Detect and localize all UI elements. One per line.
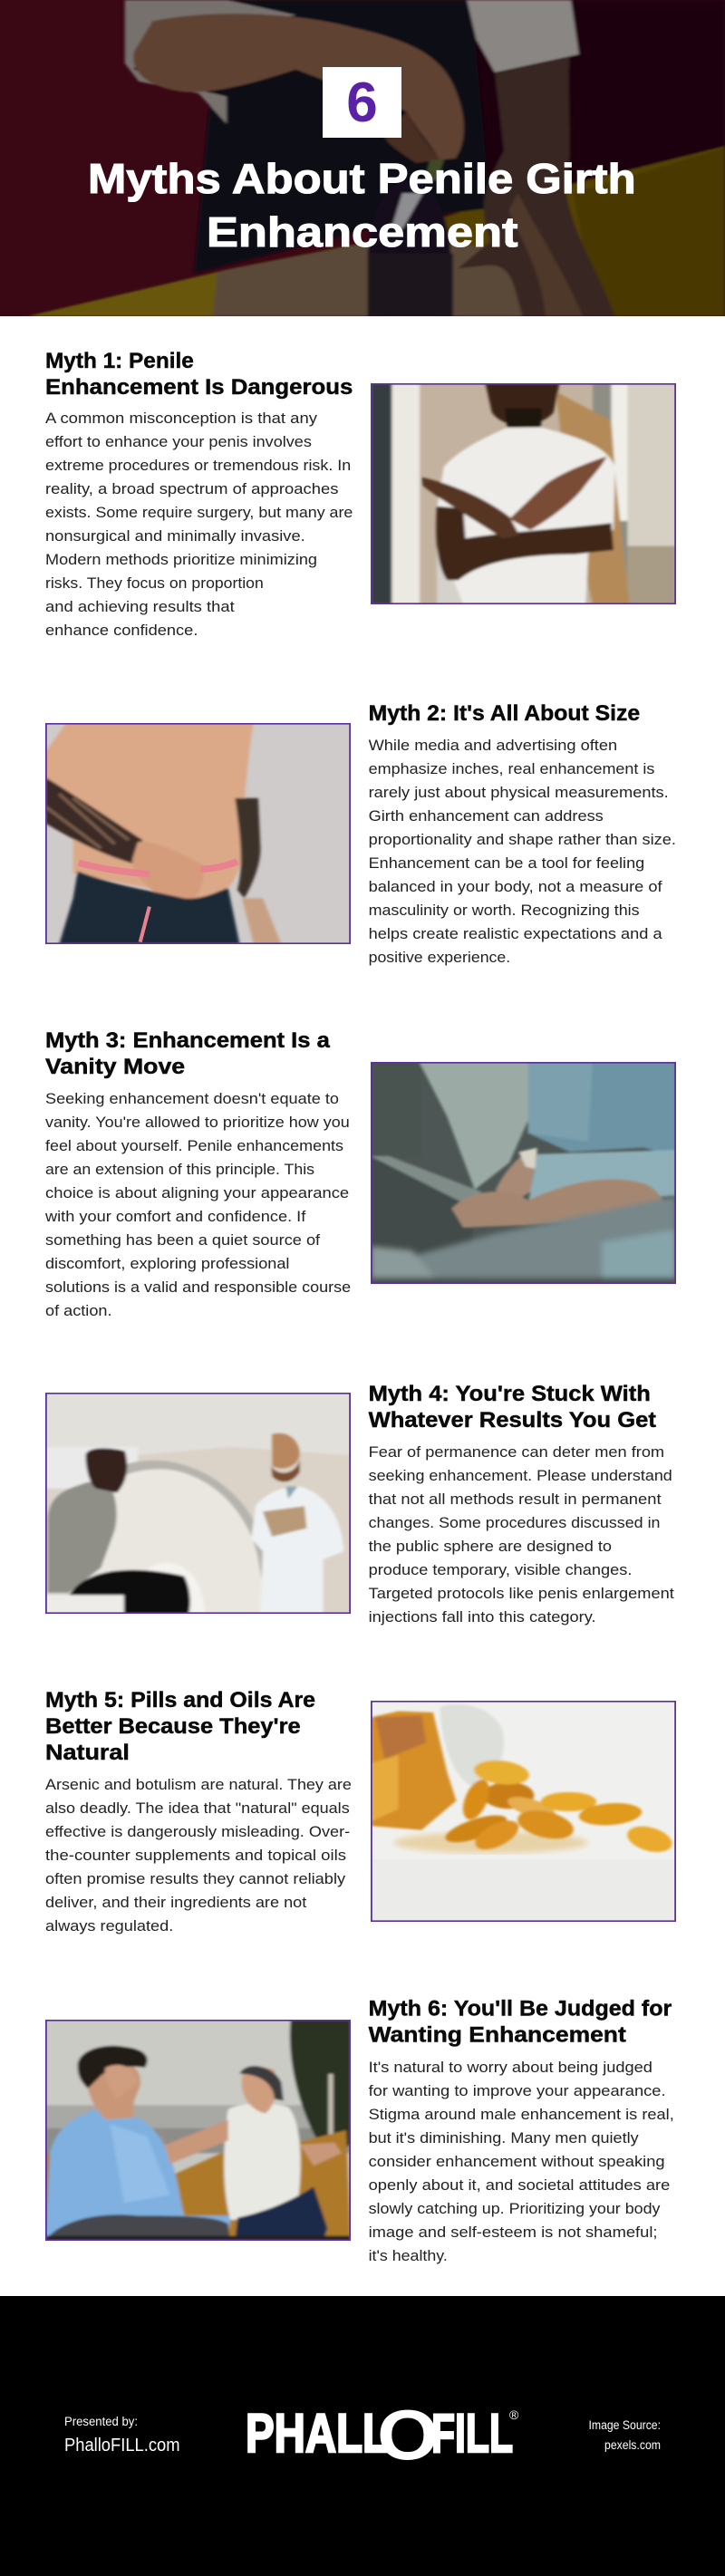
body text: myth 1: risks. They focus on proportion bbox=[45, 574, 264, 592]
heading: myth 4 bbox=[369, 1382, 656, 1433]
image source credit bbox=[589, 2418, 661, 2452]
logo: PHALLOFILL: PHALL bbox=[246, 2403, 389, 2464]
body text: myth 1 bbox=[45, 410, 353, 639]
photo: man measuring waist bbox=[45, 723, 351, 944]
body text: myth 4: produce temporary, visible changes. bbox=[369, 1561, 632, 1578]
body text: myth 5: deliver, and their ingredients are not bbox=[45, 1894, 307, 1911]
body text: myth 2: rarely just about physical measurements. bbox=[369, 784, 669, 801]
body text: myth 1: Modern methods prioritize minimizing bbox=[45, 551, 317, 568]
panel: myth 3 bbox=[44, 1028, 676, 1319]
panel: myth 1 bbox=[45, 349, 676, 639]
heading: myth 5: Better Because They're bbox=[45, 1714, 301, 1739]
body text: myth 2: proportionality and shape rather than size. bbox=[369, 831, 676, 848]
body text: myth 6: but it's diminishing. Many men quietly bbox=[369, 2129, 639, 2147]
panel: myth 5 bbox=[45, 1688, 676, 1934]
body text: myth 4: seeking enhancement. Please understand bbox=[369, 1467, 672, 1484]
body text: myth 1: nonsurgical and minimally invasive. bbox=[45, 527, 305, 545]
body text: myth 6: Stigma around male enhancement is real, bbox=[369, 2106, 674, 2123]
panel: myth 6 bbox=[45, 1997, 674, 2264]
body text: myth 2: masculinity or worth. Recognizing this bbox=[369, 902, 640, 919]
footer bbox=[0, 2296, 725, 2576]
heading: myth 6 bbox=[369, 1997, 672, 2048]
body text: myth 5: Arsenic and botulism are natural. They are bbox=[45, 1776, 352, 1793]
body text: myth 6: slowly catching up. Prioritizing your body bbox=[369, 2200, 661, 2217]
body text: myth 3: are an extension of this principle. This bbox=[45, 1161, 314, 1178]
body text: myth 3: something has been a quiet source of bbox=[45, 1231, 321, 1249]
body text: myth 4: the public sphere are designed to bbox=[369, 1538, 612, 1555]
body text: myth 6: It's natural to worry about being judged bbox=[369, 2059, 652, 2076]
body text: myth 2 bbox=[369, 737, 676, 966]
number tile: 6 bbox=[346, 72, 378, 134]
body text: myth 3: solutions is a valid and responsible course bbox=[45, 1278, 351, 1296]
body text: myth 2: While media and advertising often bbox=[369, 737, 617, 754]
body text: myth 5: the-counter supplements and topical oils bbox=[45, 1847, 346, 1864]
body text: myth 4: Fear of permanence can deter men from bbox=[369, 1443, 664, 1461]
logo: PHALLOFILL: ® bbox=[509, 2407, 519, 2422]
heading: myth 6: Wanting Enhancement bbox=[369, 2022, 626, 2048]
body text: myth 5: always regulated. bbox=[45, 1917, 173, 1934]
heading: myth 1: Myth 1: Penile bbox=[45, 349, 194, 373]
image source credit: pexels.com bbox=[604, 2438, 661, 2452]
logo: PHALLOFILL bbox=[246, 2395, 519, 2475]
body text: myth 2: helps create realistic expectations and a bbox=[369, 925, 662, 942]
body text: myth 6: image and self-esteem is not shameful; bbox=[369, 2224, 658, 2241]
body text: myth 3: of action. bbox=[45, 1302, 112, 1319]
body text: myth 3: choice is about aligning your appearance bbox=[45, 1184, 349, 1201]
body text: myth 6 bbox=[369, 2059, 674, 2264]
body text: myth 2: emphasize inches, real enhancement is bbox=[369, 760, 654, 777]
header photo: hands and eggplant bbox=[0, 0, 725, 316]
image source credit: Image Source: bbox=[589, 2418, 661, 2432]
body text: myth 2: balanced in your body, not a measure of bbox=[369, 878, 662, 895]
body text: myth 4: changes. Some procedures discussed in bbox=[369, 1514, 660, 1531]
body text: myth 3: Seeking enhancement doesn't equate to bbox=[45, 1090, 339, 1107]
number tile bbox=[323, 67, 401, 138]
heading: myth 6: Myth 6: You'll Be Judged for bbox=[369, 1997, 672, 2021]
heading: myth 2: Myth 2: It's All About Size bbox=[369, 701, 640, 726]
heading: myth 3 bbox=[45, 1028, 330, 1079]
body text: myth 1: extreme procedures or tremendous risk. In bbox=[45, 457, 351, 474]
body text: myth 6: openly about it, and societal attitudes are bbox=[369, 2176, 670, 2194]
heading: myth 4: Myth 4: You're Stuck With bbox=[369, 1382, 651, 1406]
panel: myth 4 bbox=[45, 1382, 674, 1626]
body text: myth 4 bbox=[369, 1443, 674, 1626]
photo: couple arguing on sofa bbox=[45, 2020, 351, 2241]
photo: man crossing arms bbox=[371, 383, 676, 604]
presented by credit: PhalloFILL.com bbox=[64, 2436, 179, 2455]
presented by credit bbox=[64, 2415, 179, 2455]
photo: doctor and patient at MRI scanner bbox=[45, 1393, 351, 1614]
title: Enhancement bbox=[207, 208, 517, 256]
heading: myth 3: Myth 3: Enhancement Is a bbox=[45, 1028, 330, 1053]
photo: patient with IV in hospital bbox=[371, 1062, 676, 1284]
logo: PHALLOFILL: FILL bbox=[431, 2403, 513, 2464]
heading: myth 5: Natural bbox=[45, 1741, 130, 1765]
title: Myths About Penile Girth bbox=[88, 155, 636, 202]
body text: myth 2: Girth enhancement can address bbox=[369, 807, 604, 825]
body text: myth 1: enhance confidence. bbox=[45, 622, 198, 639]
photo: spilled oil capsules bbox=[371, 1701, 676, 1922]
body text: myth 1: reality, a broad spectrum of approaches bbox=[45, 480, 339, 497]
body text: myth 3: feel about yourself. Penile enhancements bbox=[45, 1137, 343, 1154]
header banner bbox=[0, 0, 725, 338]
body text: myth 3: with your comfort and confidence. If bbox=[44, 1208, 306, 1225]
body text: myth 6: consider enhancement without speaking bbox=[369, 2153, 665, 2170]
body text: myth 2: Enhancement can be a tool for feeling bbox=[369, 854, 644, 872]
body text: myth 5 bbox=[45, 1776, 352, 1934]
heading: myth 5: Myth 5: Pills and Oils Are bbox=[45, 1688, 315, 1713]
panel: myth 2 bbox=[45, 701, 676, 966]
body text: myth 5: effective is dangerously misleading. Over- bbox=[45, 1823, 350, 1840]
heading: myth 4: Whatever Results You Get bbox=[369, 1408, 656, 1433]
heading: myth 5 bbox=[45, 1688, 315, 1765]
body text: myth 4: that not all methods result in permanent bbox=[369, 1491, 662, 1508]
presented by credit: Presented by: bbox=[64, 2415, 138, 2428]
body text: myth 1: A common misconception is that any bbox=[45, 410, 318, 427]
body text: myth 5: also deadly. The idea that "natural" equals bbox=[45, 1799, 350, 1817]
body text: myth 6: it's healthy. bbox=[369, 2247, 448, 2264]
body text: myth 2: positive experience. bbox=[369, 949, 510, 966]
body text: myth 5: often promise results they cannot reliably bbox=[45, 1870, 346, 1887]
body text: myth 6: for wanting to improve your appearance. bbox=[369, 2082, 666, 2099]
body text: myth 1: exists. Some require surgery, but many are bbox=[45, 504, 353, 521]
heading: myth 1: Enhancement Is Dangerous bbox=[45, 375, 353, 400]
body text: myth 4: Targeted protocols like penis enlargement bbox=[369, 1585, 674, 1602]
heading: myth 3: Vanity Move bbox=[45, 1055, 185, 1079]
body text: myth 3: vanity. You're allowed to prioritize how you bbox=[45, 1114, 350, 1131]
body text: myth 1: and achieving results that bbox=[45, 598, 235, 615]
heading: myth 1 bbox=[45, 349, 353, 400]
body text: myth 4: injections fall into this category. bbox=[369, 1608, 596, 1626]
body text: myth 3 bbox=[44, 1090, 351, 1319]
body text: myth 1: effort to enhance your penis involves bbox=[45, 433, 312, 450]
body text: myth 3: discomfort, exploring professional bbox=[45, 1255, 289, 1272]
title bbox=[88, 155, 636, 256]
logo: PHALLOFILL: O bbox=[377, 2395, 439, 2475]
